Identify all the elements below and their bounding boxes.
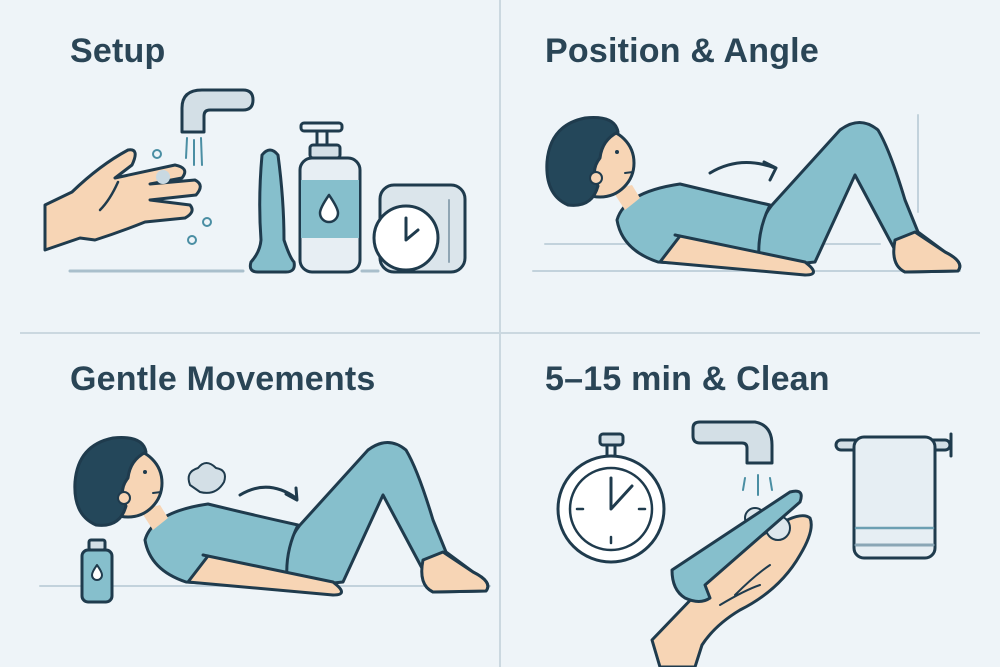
panel: gentle movements: [40, 360, 490, 602]
icon: lube bottle: [300, 123, 360, 272]
heading: Gentle Movements: Gentle Movements: [70, 360, 376, 398]
illustration: person breathing: [75, 438, 488, 595]
icon: faucet: [693, 422, 772, 495]
icon: small lube bottle: [82, 540, 112, 602]
illustration: person lying with knees bent: [547, 118, 960, 275]
icon: dilator: [250, 150, 294, 272]
heading: Position & Angle: Position & Angle: [545, 32, 819, 70]
icon: hand washing dilator: [652, 491, 811, 667]
icon: stopwatch: [558, 434, 664, 562]
panel: position & angle: [533, 32, 960, 275]
icon: hand: [45, 150, 211, 250]
icon: clock: [374, 185, 465, 272]
heading: Setup: Setup: [70, 32, 165, 70]
icon: breath puff: [189, 463, 225, 493]
arrow: [240, 487, 297, 500]
icon: towel on bar: [836, 434, 951, 558]
icon: faucet: [182, 90, 253, 165]
panel: 5-15 min & clean: [545, 360, 951, 667]
panel: setup: [45, 32, 465, 272]
heading: 5–15 min & Clean: 5–15 min & Clean: [545, 360, 830, 398]
